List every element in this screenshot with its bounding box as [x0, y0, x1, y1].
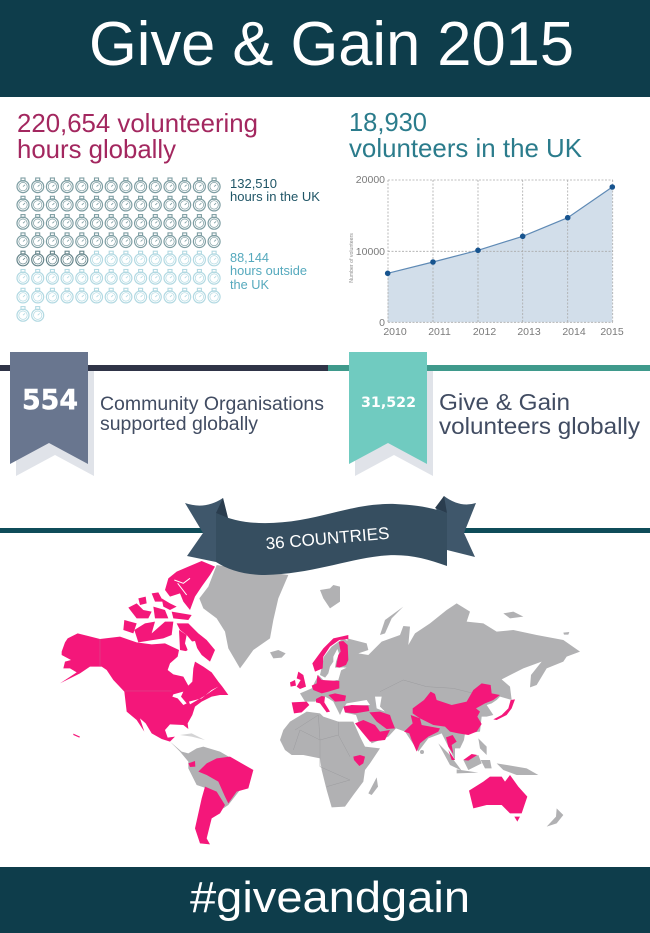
banner: 36 countries: 36 COUNTRIES	[265, 524, 390, 553]
heading: volunteering hours: hours globally	[17, 134, 176, 164]
title: Give & Gain 2015	[89, 10, 574, 79]
divider bars	[0, 365, 650, 371]
area chart: volunteers by year: 2010	[383, 326, 407, 338]
area chart: volunteers by year: 2013	[517, 326, 541, 338]
text: hours outside the UK: 88,144	[230, 250, 269, 265]
text: hours in the UK	[230, 176, 320, 204]
lakes and fiords	[172, 641, 218, 705]
area chart: volunteers by year: 10000	[356, 246, 385, 258]
europe and middle east highlights	[290, 635, 395, 742]
ribbon: 31,522: 31,522	[361, 395, 416, 411]
text: community organisations: supported globally	[100, 414, 259, 435]
area chart: volunteers by year: 20000	[356, 174, 385, 186]
footer band	[0, 867, 650, 933]
text: hours outside the UK	[230, 250, 307, 292]
divider above map	[0, 528, 650, 533]
heading: volunteering hours: 220,654 volunteering	[17, 108, 258, 138]
seas	[323, 649, 385, 712]
ribbon: 554: 554	[22, 383, 78, 416]
asia highlights	[404, 683, 515, 761]
text: hours in the UK: 132,510	[230, 176, 277, 191]
north america	[60, 561, 228, 742]
area chart: volunteers by year: 2014	[562, 326, 586, 338]
text: hours outside the UK: the UK	[230, 277, 269, 292]
world map	[60, 561, 580, 844]
area chart: volunteers by year: 2015	[600, 326, 624, 338]
area chart: volunteers by year: 0	[379, 317, 385, 329]
hashtag: #giveandgain	[190, 873, 470, 922]
text: volunteers globally	[439, 389, 640, 439]
text: hours outside the UK: hours outside	[230, 263, 307, 278]
heading: UK volunteers	[349, 107, 583, 163]
pictogram: stopwatches	[17, 178, 220, 321]
text: volunteers globally: Give & Gain	[439, 389, 570, 415]
text: community organisations: Community Organisations	[100, 394, 324, 415]
header band	[0, 0, 650, 97]
heading: UK volunteers: volunteers in the UK	[349, 133, 583, 163]
text: community organisations	[100, 394, 324, 435]
ribbon: 31,522	[349, 352, 433, 476]
area chart: volunteers by year: 2011	[428, 326, 451, 338]
ribbon: 554	[10, 352, 94, 476]
text: volunteers globally: volunteers globally	[439, 413, 640, 439]
kenya and australia highlights	[353, 755, 527, 822]
eurasia, africa, oceania base	[280, 603, 580, 827]
heading: volunteering hours	[17, 108, 258, 164]
heading: UK volunteers: 18,930	[349, 107, 427, 137]
banner: 36 countries	[185, 496, 476, 575]
text: hours in the UK: hours in the UK	[230, 189, 320, 204]
area chart: volunteers by year	[349, 174, 624, 338]
area chart: volunteers by year: Number of volunteers	[349, 233, 355, 283]
area chart: volunteers by year: 2012	[473, 326, 496, 338]
borders	[293, 680, 473, 787]
south america, greenland, iceland	[73, 565, 340, 844]
